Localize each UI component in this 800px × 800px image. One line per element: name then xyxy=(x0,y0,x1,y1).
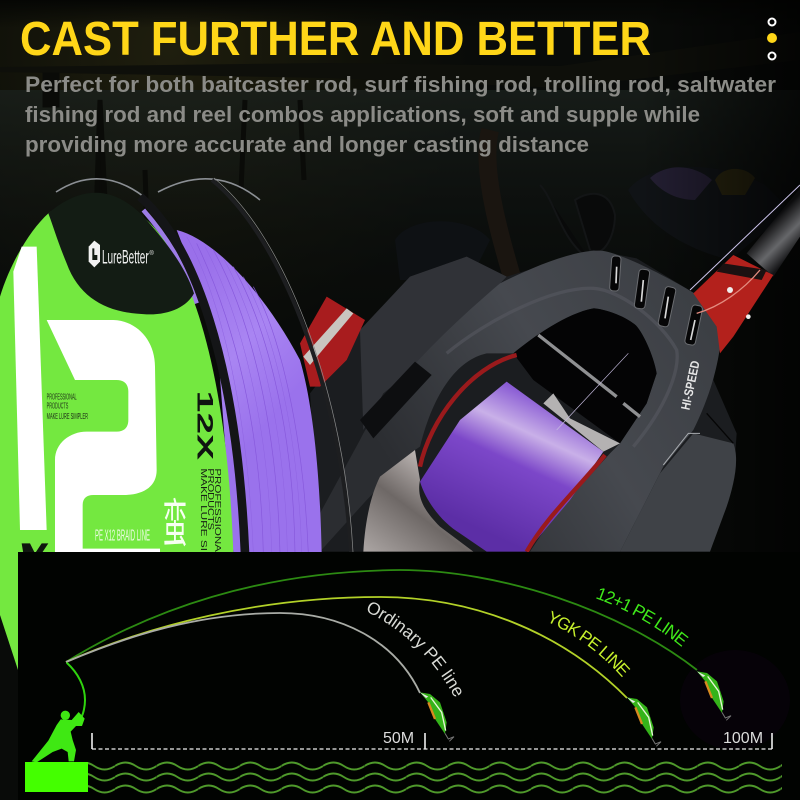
dark logo patch xyxy=(48,193,194,314)
rod line xyxy=(690,185,800,290)
ordinary line curve xyxy=(66,613,420,693)
red reel knob xyxy=(300,297,365,387)
water waves xyxy=(88,758,782,796)
brand logo: ® xyxy=(149,250,154,257)
baitcasting reel xyxy=(300,185,800,552)
lure glow xyxy=(680,650,790,750)
rod blank xyxy=(747,188,800,277)
brand logo xyxy=(89,241,154,268)
distance scale xyxy=(92,733,772,749)
12+1 PE line curve xyxy=(66,570,697,670)
line spool: PE X12 BRAID LINE xyxy=(95,528,150,545)
description text block: providing more accurate and longer casting distance xyxy=(25,132,589,157)
YGK line curve xyxy=(66,597,627,698)
purple line body xyxy=(177,230,322,553)
green disc xyxy=(0,195,233,700)
spool line xyxy=(557,353,628,430)
12+1 label: 12+1 PE LINE xyxy=(596,588,689,647)
vertical tagline: PROFESSIONAL xyxy=(213,468,222,559)
100M label: 100M xyxy=(723,730,763,747)
brand logo: LureBetter xyxy=(102,247,149,268)
description text block: fishing rod and reel combos applications, soft and supple while xyxy=(25,102,700,127)
line spool xyxy=(0,193,322,700)
vertical tagline: PRODUCTS xyxy=(206,468,215,530)
description text block xyxy=(25,72,776,157)
frame slots xyxy=(609,256,703,346)
frame inner lip xyxy=(447,288,677,447)
tagline: PRODUCTS xyxy=(47,400,68,410)
tagline: PROFESSIONAL xyxy=(47,391,77,401)
lower right body xyxy=(620,433,736,552)
green platform xyxy=(25,762,88,792)
hi-speed text: HI-SPEED xyxy=(679,359,703,411)
reel bars xyxy=(538,335,640,417)
reel frame xyxy=(320,251,721,552)
lure far xyxy=(697,671,731,720)
ordinary label: Ordinary PE line xyxy=(368,602,462,696)
lure near xyxy=(420,692,454,741)
angler silhouette and rod xyxy=(32,663,85,762)
vertical tagline xyxy=(199,468,222,592)
vertical tagline: MAKE LURE SIMPLER xyxy=(199,468,208,592)
line spool: MAKE LURE SIMPLER xyxy=(47,411,88,421)
purple sliver inside rim xyxy=(143,210,197,303)
pagination dots xyxy=(767,18,777,60)
red rod ferrule xyxy=(693,255,773,353)
numeral 1 xyxy=(13,247,47,530)
lure middle xyxy=(627,697,661,746)
reel opening xyxy=(513,308,657,443)
spool rim xyxy=(140,197,245,553)
red rims xyxy=(420,355,605,552)
purple line on reel spool xyxy=(420,382,603,552)
YGK label: YGK PE LINE xyxy=(550,610,630,678)
vertical kanji: 蛮 xyxy=(163,482,187,557)
thin rear spool rim xyxy=(212,178,353,552)
50M label: 50M xyxy=(383,730,414,747)
slot highlights xyxy=(616,267,695,340)
casting distance panel xyxy=(18,552,790,794)
numeral 2 xyxy=(47,320,160,553)
X numeral fragment xyxy=(22,543,48,553)
silver slider xyxy=(543,393,620,452)
title: CAST FURTHER AND BETTER xyxy=(20,13,651,66)
tagline xyxy=(47,391,88,421)
silver plate xyxy=(363,450,473,552)
description text block: Perfect for both baitcaster rod, surf fishing rod, trolling rod, saltwater xyxy=(25,72,776,97)
12X mark: 12X xyxy=(192,391,217,461)
